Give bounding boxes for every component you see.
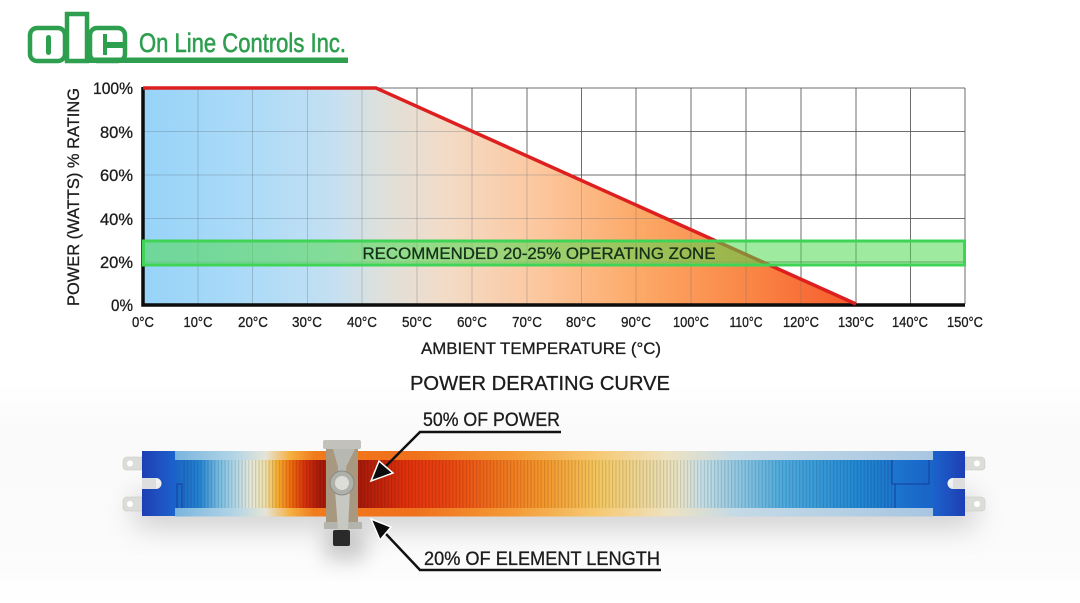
x-axis tick labels: 100°C <box>673 314 709 331</box>
callout: 20% of element length: 20% OF ELEMENT LENGTH <box>424 548 660 570</box>
y-axis tick labels: 100% <box>93 80 133 98</box>
recommended operating zone band: RECOMMENDED 20-25% OPERATING ZONE <box>362 245 716 263</box>
x-axis tick labels: 60°C <box>457 314 487 331</box>
y-axis tick labels: 0% <box>111 297 133 315</box>
chart: power derating curve <box>64 80 983 331</box>
x-axis tick labels: 40°C <box>347 314 377 331</box>
logo: On Line Controls Inc.: On Line Controls Inc. <box>139 28 346 58</box>
recommended operating zone band <box>144 241 964 265</box>
x-axis tick labels: 50°C <box>402 314 432 331</box>
right end cap <box>933 451 965 516</box>
x-axis tick labels: 80°C <box>566 314 596 331</box>
axes <box>143 87 965 305</box>
heat gradient area under curve <box>143 88 856 304</box>
x-axis tick labels: 140°C <box>892 314 928 331</box>
x-axis tick labels: 130°C <box>838 314 874 331</box>
callout: 50% of power <box>371 409 561 481</box>
y-axis tick labels: 60% <box>100 167 133 185</box>
y-axis tick labels: 80% <box>100 124 133 142</box>
x-axis tick labels: 20°C <box>238 314 268 331</box>
left end cap <box>142 451 175 516</box>
x-axis tick labels <box>132 314 983 331</box>
derating line <box>143 88 856 304</box>
x-axis tick labels: 90°C <box>621 314 651 331</box>
x-axis tick labels: 110°C <box>730 314 763 331</box>
callout: 50% of power: 50% OF POWER <box>423 409 560 431</box>
fin body with thermal gradient <box>175 459 933 509</box>
x-axis tick labels: 150°C <box>947 314 983 331</box>
x-axis tick labels: 120°C <box>783 314 819 331</box>
x-axis tick labels: 70°C <box>512 314 542 331</box>
callout: 20% of element length <box>371 519 661 570</box>
x-axis tick labels: 30°C <box>292 314 322 331</box>
y-axis tick labels: 20% <box>100 254 133 272</box>
element shadow <box>135 495 975 527</box>
y-axis title: POWER (WATTS) % RATING <box>64 88 83 306</box>
top and bottom rails <box>175 451 933 460</box>
heading: power derating curve: POWER DERATING CURVE <box>410 373 670 395</box>
mounting clamp <box>323 440 362 546</box>
y-axis tick labels: 40% <box>100 211 133 229</box>
left terminal tabs <box>123 457 142 511</box>
x-axis tick labels: 10°C <box>184 314 213 331</box>
right terminal tabs <box>965 457 985 511</box>
logo: On Line Controls Inc. <box>30 14 348 63</box>
x-axis tick labels: 0°C <box>132 314 154 331</box>
x-axis title: AMBIENT TEMPERATURE (°C) <box>421 339 661 358</box>
y-axis tick labels <box>93 80 133 315</box>
heating element diagram <box>123 440 985 560</box>
